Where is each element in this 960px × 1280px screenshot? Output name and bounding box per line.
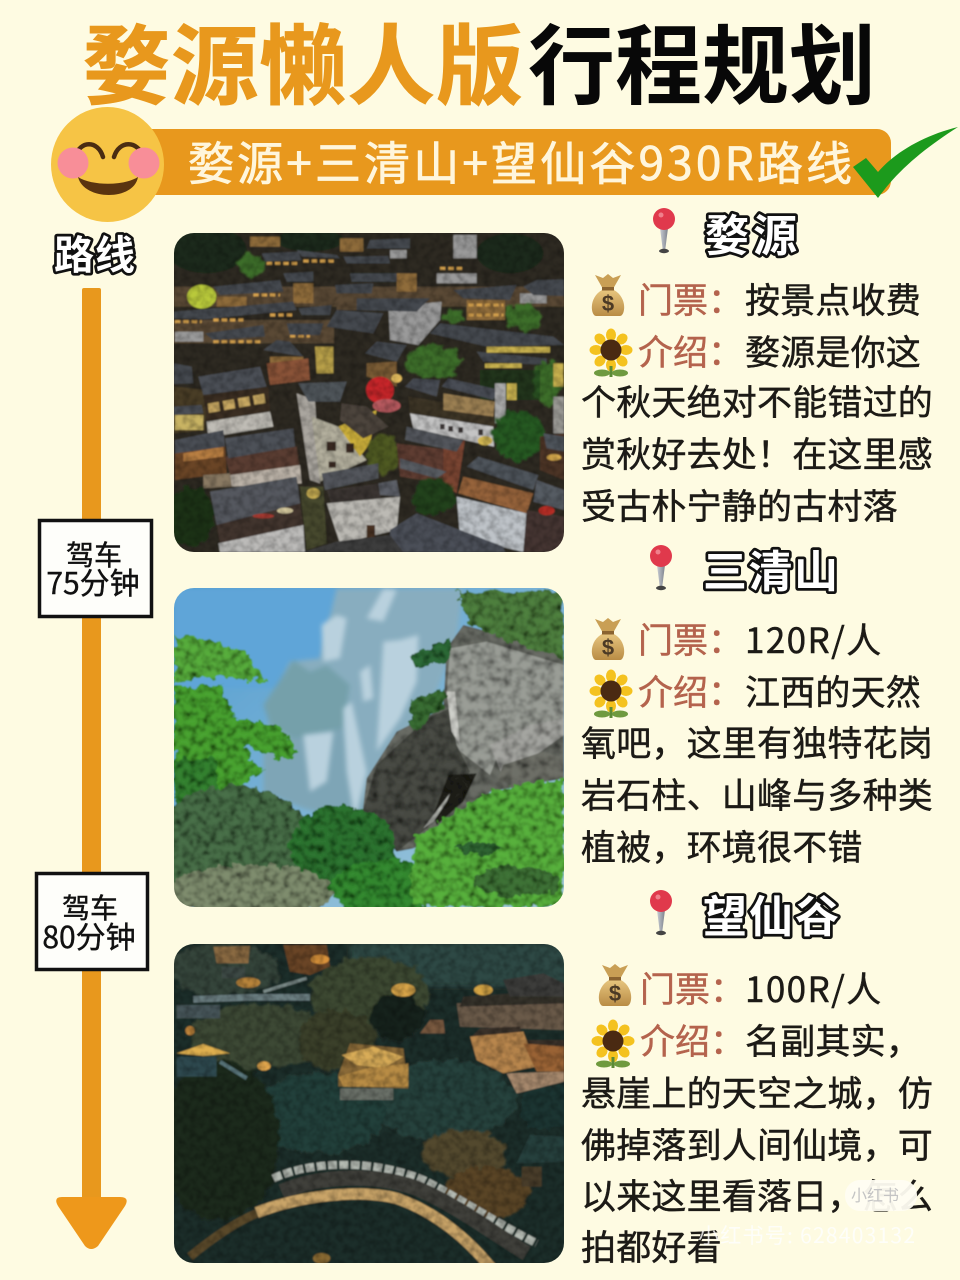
- icon: smiling emoji: [51, 107, 164, 222]
- icon: sunflower: [590, 670, 632, 718]
- drive time box 2: [36, 874, 148, 970]
- icon: sunflower: [592, 1020, 634, 1068]
- description: 个秋天绝对不能错过的: [581, 375, 933, 426]
- drive time box 1: [40, 520, 152, 616]
- watermark: [698, 1180, 917, 1250]
- route label: 路线: [54, 223, 135, 281]
- photo: Wuyuan village at dusk: [167, 227, 570, 555]
- photo: Sanqingshan mountain: [174, 588, 564, 907]
- description: 受古朴宁静的古村落: [581, 479, 898, 530]
- ticket info: 按景点收费: [745, 273, 921, 324]
- description: [581, 325, 933, 530]
- section: Wuyuan: [581, 200, 933, 530]
- subtitle banner: 婺源+三清山+望仙谷930R路线: [188, 128, 852, 194]
- description: 植被，环境很不错: [581, 820, 863, 871]
- heading: Sanqingshan: 三清山: [703, 536, 838, 600]
- ticket info: 门票：: [638, 613, 743, 664]
- photo: Wangxian valley: [160, 940, 573, 1270]
- drive time box 2: 80分钟: [42, 913, 136, 957]
- title: [83, 0, 876, 123]
- icon: money bag: [592, 618, 624, 660]
- description: 介绍：: [638, 325, 743, 376]
- description: 拍都好看: [581, 1220, 722, 1271]
- drive time box 2: 驾车: [62, 887, 118, 927]
- description: 佛掉落到人间仙境，可: [581, 1118, 933, 1169]
- ticket info: 120R/人: [745, 613, 883, 664]
- ticket info: 门票：: [638, 273, 743, 324]
- icon: green check mark: [853, 127, 958, 198]
- description: [581, 665, 933, 871]
- icon: sunflower: [590, 328, 632, 377]
- description: 悬崖上的天空之城，仿: [581, 1066, 933, 1117]
- description: 介绍：: [638, 665, 743, 716]
- icon: money bag: [592, 274, 624, 316]
- icon: map pin: [653, 208, 675, 253]
- description: [581, 1014, 933, 1271]
- section: Wangxian valley: [581, 881, 933, 1271]
- ticket info: 100R/人: [745, 962, 883, 1013]
- description: 以来这里看落日，怎么: [581, 1169, 933, 1220]
- route arrow: [56, 288, 127, 1249]
- description: 江西的天然: [745, 665, 921, 716]
- description: 氧吧，这里有独特花岗: [581, 716, 933, 767]
- drive time box 1: 75分钟: [46, 559, 140, 603]
- title: 婺源懒人版: [83, 0, 523, 123]
- description: 岩石柱、山峰与多种类: [581, 768, 933, 819]
- description: 婺源是你这: [745, 325, 921, 376]
- description: 介绍：: [640, 1014, 745, 1065]
- window strips: [175, 261, 503, 342]
- drive time box 1: 驾车: [66, 534, 122, 574]
- watermark: 小红书: [851, 1182, 899, 1206]
- description: 赏秋好去处！在这里感: [581, 427, 933, 478]
- icon: map pin: [650, 890, 672, 935]
- description: 名副其实，: [745, 1014, 921, 1065]
- icon: money bag: [599, 964, 631, 1006]
- heading: Wangxian valley: 望仙谷: [703, 881, 839, 945]
- watermark: 小红书号: 628403132: [698, 1220, 915, 1250]
- section: Sanqingshan: [581, 536, 933, 871]
- ticket info: 门票：: [640, 962, 745, 1013]
- heading: Wuyuan: 婺源: [705, 200, 797, 264]
- title: 行程规划: [528, 0, 876, 123]
- icon: map pin: [650, 545, 672, 590]
